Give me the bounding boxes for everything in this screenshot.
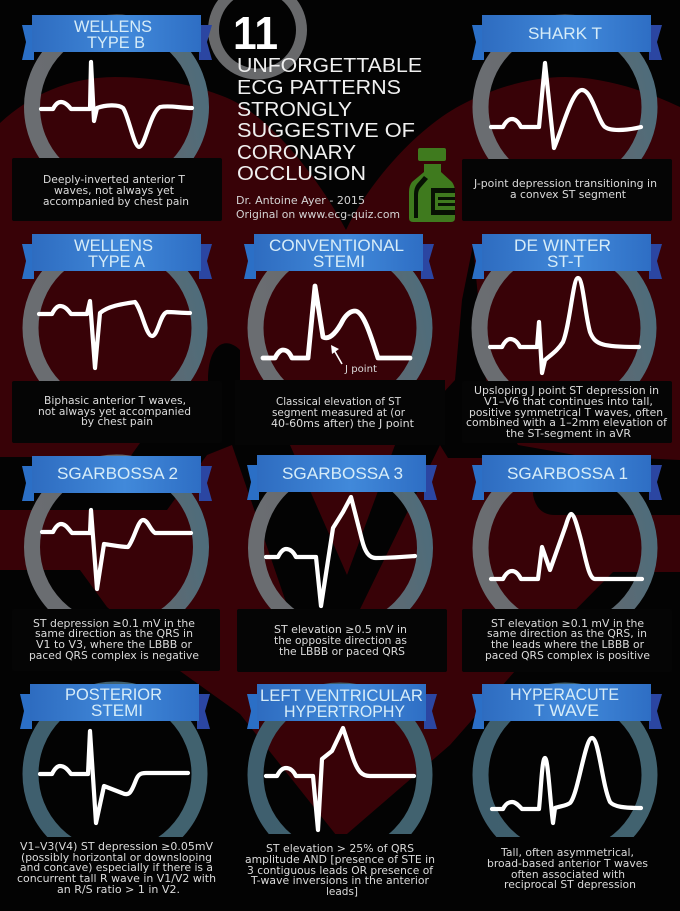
heading: LEFT VENTRICULAR (260, 686, 423, 705)
description box: the leads where the LBBB or (491, 639, 645, 651)
ECG trace (491, 63, 641, 148)
ribbon (247, 684, 437, 729)
description box: Classical elevation of ST (276, 396, 402, 408)
ribbon (472, 15, 662, 60)
heading (74, 17, 152, 52)
heading: TYPE B (87, 33, 145, 52)
ring (480, 464, 650, 632)
title text (237, 54, 422, 185)
panel: Sgarbossa 2 (12, 456, 220, 671)
ribbon (472, 684, 662, 729)
title text: ECG PATTERNS (237, 76, 401, 99)
heading (269, 236, 404, 271)
ribbon (22, 15, 212, 60)
ring (30, 244, 200, 412)
ECG trace (490, 278, 639, 373)
heading: CONVENTIONAL (269, 236, 404, 255)
heading (514, 236, 611, 271)
heading (74, 236, 153, 271)
description box (12, 158, 222, 221)
heading: WELLENS (74, 236, 153, 255)
description box: ST elevation > 25% of QRS (266, 843, 414, 855)
ring: header (214, 0, 302, 74)
heading: ST-T (547, 252, 584, 271)
panel: Conventional STEMI (235, 234, 445, 445)
description box (10, 837, 222, 905)
ring (480, 690, 650, 860)
ribbon (22, 456, 212, 501)
heading: SGARBOSSA 3 (282, 464, 403, 483)
description box: T-wave inversions in the anterior (250, 875, 430, 887)
heading: WELLENS (74, 17, 152, 36)
heading: T WAVE (534, 701, 599, 720)
description box (235, 834, 447, 905)
description box: Deeply-inverted anterior T (43, 174, 186, 186)
description box (237, 609, 447, 672)
heading: HYPERTROPHY (284, 702, 405, 721)
heading: STEMI (91, 701, 143, 720)
description box: V1–V3(V4) ST depression ≥0.05mV (20, 841, 214, 853)
ribbon (247, 455, 437, 500)
description box: V1–V6 that continues into tall, (484, 396, 653, 408)
title text: STRONGLY (237, 98, 352, 121)
description box: paced QRS complex is negative (29, 650, 199, 662)
ring (30, 690, 200, 858)
heading: STEMI (313, 252, 365, 271)
description box: reciprocal ST depression (504, 879, 636, 891)
heading (65, 685, 162, 720)
panel: Wellens type A (12, 234, 222, 443)
description box (462, 381, 672, 443)
ribbon (472, 234, 662, 279)
description box: Tall, often asymmetrical, (500, 847, 634, 859)
description box: amplitude AND [presence of STE in (245, 854, 435, 866)
description box: broad-based anterior T waves (487, 858, 648, 870)
panel: Sgarbossa 3 (237, 455, 447, 672)
title text: SUGGESTIVE OF (237, 119, 415, 142)
description box: same direction as the QRS in (35, 628, 193, 640)
description box: Biphasic anterior T waves, (44, 395, 186, 407)
panel: De Winter ST-T (462, 234, 672, 443)
description box: waves, not always yet (54, 185, 174, 197)
panel: Left ventricular hypertrophy (235, 684, 447, 905)
heading: SGARBOSSA 2 (57, 464, 178, 483)
panel: Sgarbossa 1 (462, 455, 672, 672)
description box: segment measured at (or (272, 407, 406, 419)
description box: a convex ST segment (510, 189, 626, 201)
ECG trace (266, 497, 415, 606)
ring (256, 464, 425, 632)
ring (32, 462, 201, 632)
description box: (possibly horizontal or downsloping (21, 852, 212, 864)
description box: not always yet accompanied (38, 406, 191, 418)
panel: Wellens type B (12, 15, 222, 221)
ring (256, 690, 424, 860)
description box: J-point depression transitioning in (473, 178, 657, 190)
author credit (236, 195, 400, 221)
author credit: Dr. Antoine Ayer - 2015 (236, 195, 365, 207)
title text: OCCLUSION (237, 162, 366, 185)
panel: Posterior STEMI (10, 684, 222, 905)
heading: TYPE A (88, 252, 146, 271)
title text: CORONARY (237, 141, 356, 164)
panel: Shark T (462, 15, 672, 221)
heading: SGARBOSSA 1 (507, 464, 628, 483)
description box: ST depression ≥0.1 mV in the (33, 618, 195, 630)
ribbon (472, 455, 662, 500)
description box: leads] (326, 886, 358, 898)
title text: UNFORGETTABLE (237, 54, 422, 77)
ECG trace (263, 286, 410, 358)
ECG trace (42, 510, 191, 589)
ECG trace (39, 301, 190, 368)
ECG trace (41, 62, 192, 147)
description box: positive symmetrical T waves, often (469, 407, 663, 419)
description box: concurrent tall R wave in V1/V2 with (17, 873, 216, 885)
ECG trace (492, 738, 641, 823)
description box: the LBBB or paced QRS (279, 646, 405, 658)
description box (235, 380, 445, 445)
description box: by chest pain (81, 416, 153, 428)
arrow: J point (331, 345, 342, 364)
heading (510, 685, 619, 720)
ring (480, 22, 650, 192)
ECG trace (266, 728, 414, 830)
description box: 3 contiguous leads OR presence of (247, 865, 433, 877)
ring (480, 244, 648, 412)
description box (462, 609, 672, 672)
panel: Hyperacute T wave (462, 684, 674, 905)
description box: ST elevation ≥0.1 mV in the (491, 618, 644, 630)
description box (462, 159, 672, 221)
description box (12, 609, 220, 671)
description box: V1 to V3, where the LBBB or (36, 639, 193, 651)
ECG trace (491, 514, 642, 579)
description box: and concave) especially if there is a (20, 862, 213, 874)
heading: HYPERACUTE (510, 685, 619, 704)
ribbon (244, 234, 434, 279)
ribbon (20, 684, 210, 729)
description box (462, 837, 674, 905)
ECG trace (40, 731, 188, 823)
icon: green medicine bottle (409, 148, 455, 222)
description box: the ST-segment in aVR (506, 428, 631, 440)
description box: the opposite direction as (274, 635, 407, 647)
description box: accompanied by chest pain (43, 196, 189, 208)
heading: DE WINTER (514, 236, 611, 255)
ring (256, 244, 424, 412)
title number: 11 (233, 7, 278, 59)
J point label: J point (344, 364, 377, 375)
heading: POSTERIOR (65, 685, 162, 704)
ribbon (22, 234, 212, 279)
ring (32, 22, 201, 192)
description box: paced QRS complex is positive (485, 650, 650, 662)
description box: 40-60ms after) the J point (271, 418, 414, 430)
description box: combined with a 1–2mm elevation of (466, 417, 667, 429)
description box: an R/S ratio > 1 in V2. (57, 884, 180, 896)
description box (12, 381, 222, 443)
heading (260, 686, 423, 721)
description box: often associated with (511, 869, 625, 881)
author credit: Original on www.ecg-quiz.com (236, 209, 400, 221)
heading: SHARK T (528, 24, 602, 43)
description box: ST elevation ≥0.5 mV in (274, 624, 407, 636)
description box: Upsloping J point ST depression in (474, 385, 659, 397)
title block (233, 7, 422, 221)
description box: same direction as the QRS, in (487, 628, 647, 640)
